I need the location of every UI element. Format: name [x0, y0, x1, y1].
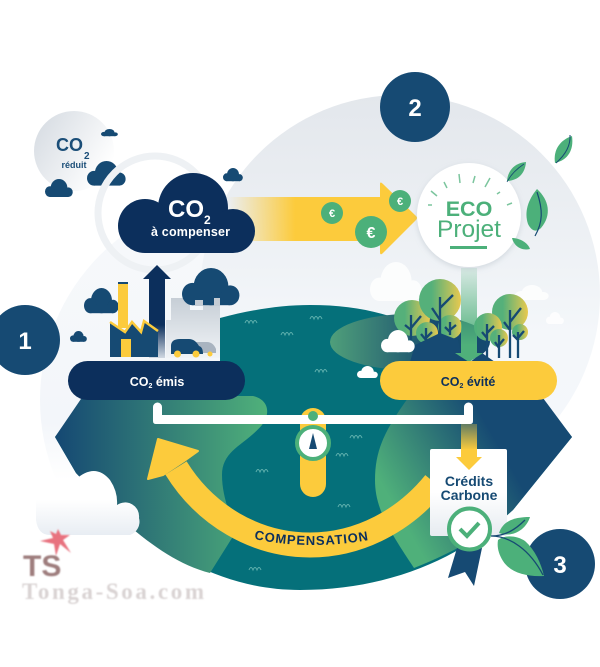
globe ocean [55, 305, 572, 590]
forest [357, 262, 564, 378]
TS letters: TS [23, 550, 61, 583]
label CO2 à compenser: CO [168, 196, 204, 223]
CO2 avoided pill: 2 [459, 383, 463, 390]
trunks [405, 295, 524, 358]
chimney [118, 283, 128, 328]
waves [245, 316, 362, 570]
circle number 3: 3 [553, 552, 567, 579]
factory and city [110, 265, 239, 358]
palm icon [40, 529, 71, 556]
ECO Projet wordmark: Projet [437, 216, 501, 243]
right land [375, 398, 572, 568]
CO2 emitted pill [68, 361, 245, 400]
CO2 avoided pill [380, 361, 557, 400]
circle number 1: 1 [18, 328, 32, 355]
circle number 2: 2 [408, 95, 422, 122]
check badge [449, 508, 490, 550]
card label [441, 473, 498, 503]
label CO2 réduit: réduit [61, 160, 87, 170]
ring behind CO2 cloud [98, 156, 212, 270]
circle number 3 [525, 529, 595, 599]
ribbon [448, 548, 482, 586]
credits carbon card [430, 424, 507, 586]
euro coins [321, 190, 411, 248]
center pillar [300, 408, 326, 497]
label CO2 à compenser: à compenser [151, 225, 230, 239]
CO2 emitted pill: CO [130, 375, 148, 389]
factory body [110, 321, 158, 357]
euro coins: € [329, 208, 335, 220]
white cloud lower left [36, 471, 140, 535]
gauge dial [297, 427, 329, 459]
compensation label: COMPENSATION [255, 530, 368, 545]
yellow arrow [456, 424, 482, 470]
globe [55, 305, 572, 590]
upper land [330, 314, 490, 370]
car [171, 339, 216, 358]
pale background blob [40, 95, 600, 605]
card label: Carbone [441, 487, 498, 503]
rays [428, 174, 512, 205]
card label: Crédits [445, 473, 493, 489]
watermark logo [22, 529, 204, 604]
buildings [166, 293, 220, 358]
label CO2 réduit: 2 [84, 151, 90, 162]
building cloud [182, 268, 239, 305]
balance scale [153, 402, 473, 497]
label CO2 à compenser [151, 196, 230, 239]
green down arrow [455, 268, 483, 362]
ECO Projet wordmark: ECO [446, 197, 492, 221]
ECO Projet wordmark [437, 197, 501, 243]
circle number 1 [0, 305, 60, 375]
pale clouds [370, 262, 564, 324]
CO2 emitted pill: 2 [148, 383, 152, 390]
leaves [507, 135, 572, 249]
CO2 reduced circle [34, 111, 114, 191]
hills [410, 333, 495, 362]
up arrow [143, 265, 171, 358]
tree crowns [394, 279, 528, 347]
circle number 2 [380, 72, 450, 142]
CO2 emitted pill: émis [152, 375, 184, 389]
CO2 to offset cloud [118, 173, 255, 253]
label CO2 réduit: CO [56, 135, 83, 155]
Eco Projet circle [417, 163, 521, 267]
badge leaves [491, 517, 544, 576]
compensation arrow [147, 438, 430, 558]
euro coins: € [397, 196, 403, 208]
CO2 avoided pill: évité [463, 375, 495, 389]
euro coins: € [367, 225, 376, 242]
white clouds [357, 330, 415, 378]
beam [153, 402, 473, 424]
left land [55, 396, 267, 573]
small clouds [45, 129, 243, 342]
site name: Tonga-Soa.com [22, 579, 204, 604]
CO2 avoided pill: CO [441, 375, 459, 389]
label CO2 réduit [56, 135, 90, 170]
label CO2 à compenser: 2 [204, 213, 211, 227]
yellow money arrow [228, 182, 417, 254]
